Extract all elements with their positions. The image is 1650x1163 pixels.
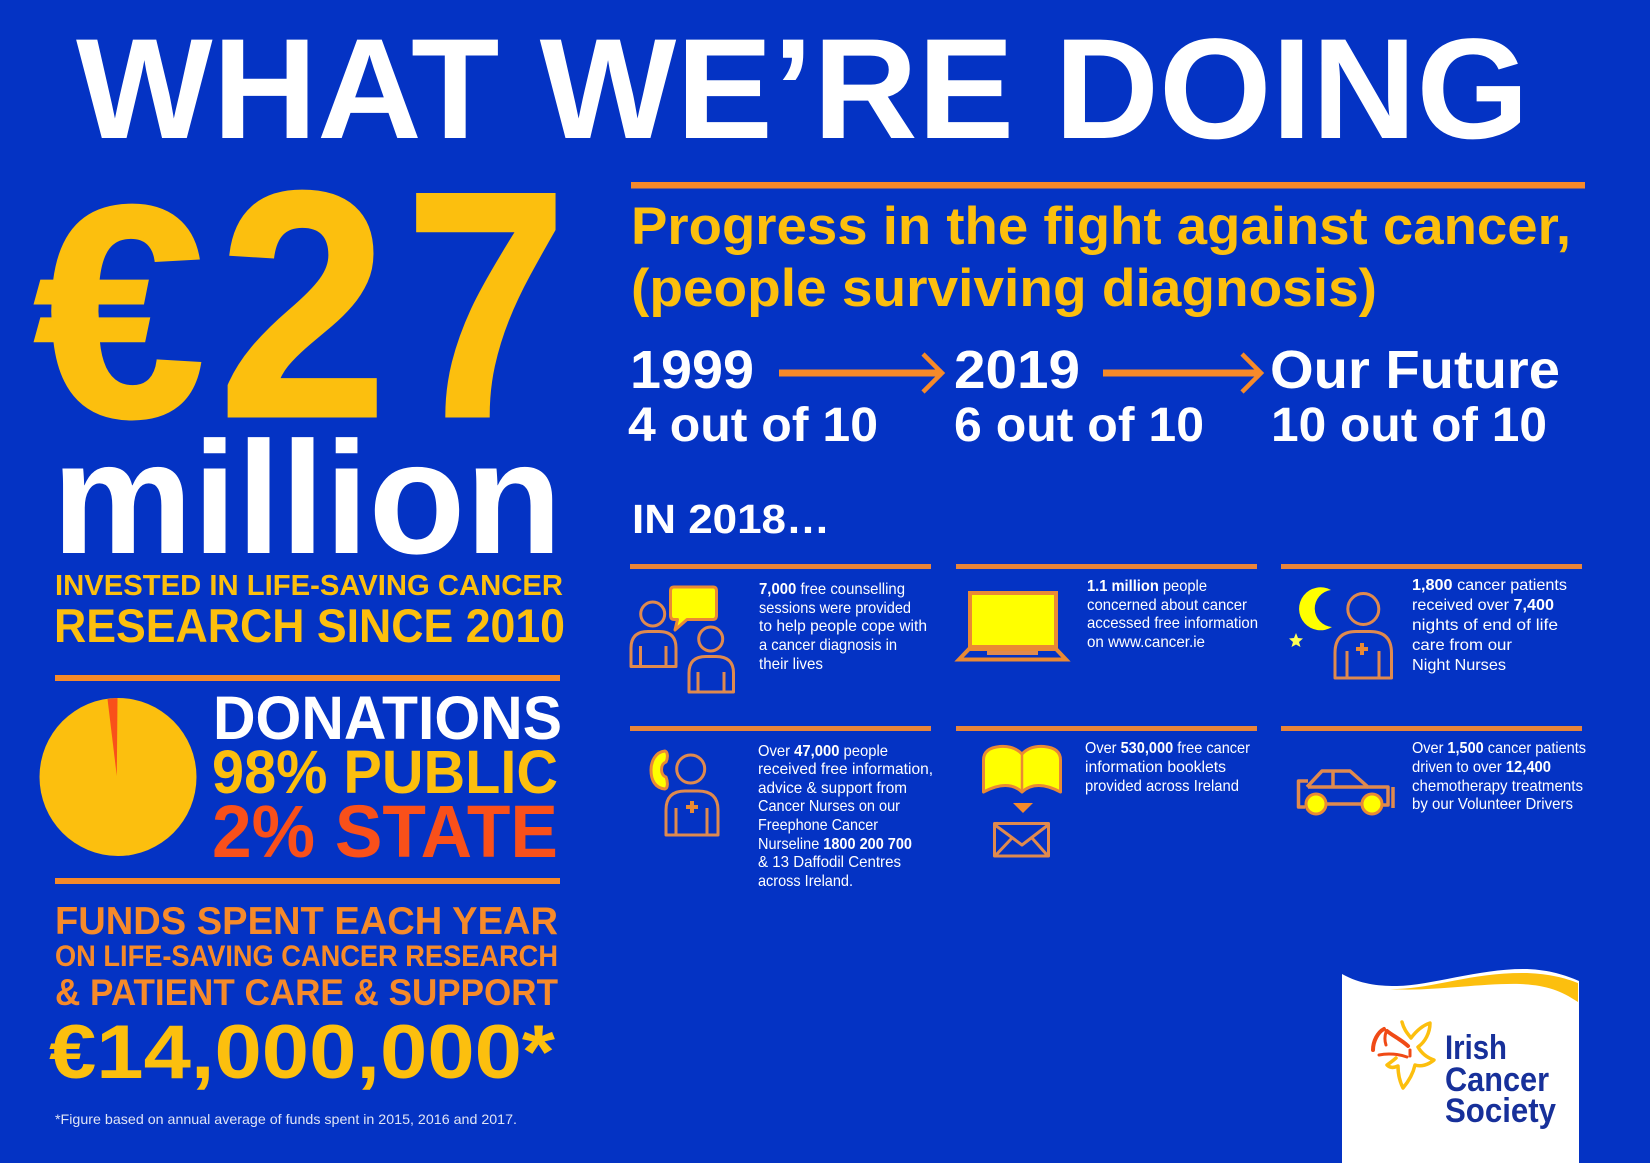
panel: nurseline (651, 743, 933, 890)
icon: moon and star (1289, 587, 1332, 647)
word: million: million (52, 408, 562, 587)
big figure: 27 euro: 7 (405, 126, 567, 485)
big figure: 27 euro: € (34, 143, 205, 480)
logo wordmark: Irish (1445, 1029, 1507, 1067)
text: volunteer drivers: by our Volunteer Drivers (1412, 796, 1573, 813)
logo wordmark: Society (1445, 1092, 1556, 1130)
icon: laptop (959, 593, 1066, 660)
panel: counselling (631, 581, 927, 692)
funds line 1: FUNDS SPENT EACH YEAR (55, 900, 558, 943)
text: volunteer drivers (1412, 740, 1586, 813)
text: counselling: 7,000 free counselling (759, 581, 905, 598)
logo: Irish Cancer Society (1342, 969, 1579, 1163)
text: nurseline: Over 47,000 people (758, 743, 888, 760)
text: counselling: a cancer diagnosis in (759, 637, 897, 654)
text: volunteer drivers: Over 1,500 cancer patients (1412, 740, 1586, 757)
text: counselling: to help people cope with (759, 618, 927, 635)
text: nurseline (758, 743, 933, 890)
icon: envelope (994, 824, 1048, 856)
panel: investment headline (34, 126, 567, 652)
icon: daffodil (1373, 1022, 1434, 1088)
public share: 98% PUBLIC (212, 738, 558, 806)
future stat: Our Future (1270, 340, 1560, 400)
text: nurseline: Cancer Nurses on our (758, 798, 901, 815)
future stat (1270, 340, 1560, 452)
2019 stat: 6 out of 10 (954, 399, 1204, 452)
text: website (1087, 578, 1258, 651)
text: booklets: information booklets (1085, 759, 1226, 776)
future stat: 10 out of 10 (1271, 399, 1547, 452)
text: volunteer drivers: chemotherapy treatments (1412, 778, 1583, 795)
1999 stat (628, 340, 878, 452)
1999 stat: 1999 (630, 340, 754, 400)
arrow: 1999 to 2019 (779, 354, 942, 392)
text: counselling: their lives (759, 656, 823, 673)
text: volunteer drivers: driven to over 12,400 (1412, 759, 1551, 776)
funds figure: €14,000,000* (49, 1010, 555, 1095)
text: night nurses: 1,800 cancer patients (1412, 577, 1567, 594)
panel: volunteer drivers (1298, 740, 1586, 814)
text: night nurses: Night Nurses (1412, 657, 1506, 674)
big figure: 27 euro: 2 (218, 126, 388, 485)
funds line 3: & PATIENT CARE & SUPPORT (55, 972, 558, 1013)
heading: progress: Progress in the fight against cancer, (631, 197, 1571, 256)
logo swoosh (1390, 973, 1578, 1002)
state share: 2% STATE (212, 790, 558, 873)
arrow: 2019 to future (1103, 354, 1261, 392)
text: website: accessed free information (1087, 615, 1258, 632)
text: nurseline: Freephone Cancer (758, 817, 879, 834)
panel: donations text (212, 684, 562, 873)
logo wordmark: Cancer (1445, 1061, 1549, 1099)
timeline (628, 340, 1560, 452)
text: website: on www.cancer.ie (1087, 634, 1205, 651)
text: nurseline: Nurseline 1800 200 700 (758, 836, 912, 853)
text: counselling: sessions were provided (759, 600, 911, 617)
footnote: *Figure based on annual average of funds spent in 2015, 2016 and 2017. (55, 1111, 517, 1127)
icon: open book (984, 746, 1060, 792)
heading: progress (631, 197, 1571, 318)
text: night nurses (1412, 577, 1567, 674)
icon: phone (651, 751, 667, 789)
donations heading: DONATIONS (213, 684, 562, 752)
2019 stat (954, 340, 1204, 452)
investment caption line 1: INVESTED IN LIFE-SAVING CANCER (55, 570, 563, 602)
icon: down triangle (1013, 803, 1033, 813)
investment caption line 2: RESEARCH SINCE 2010 (54, 599, 565, 652)
icon: nurse (1335, 594, 1392, 678)
logo panel (1342, 969, 1579, 1163)
panel: website (959, 578, 1258, 660)
text: website: concerned about cancer (1087, 597, 1248, 614)
text: night nurses: care from our (1412, 637, 1513, 654)
text: booklets (1085, 740, 1251, 795)
text: counselling (759, 581, 927, 673)
icon: nurse (666, 755, 718, 835)
text: night nurses: nights of end of life (1412, 617, 1558, 634)
panel: night nurses (1289, 577, 1567, 678)
text: nurseline: received free information, (758, 761, 933, 778)
text: nurseline: & 13 Daffodil Centres (758, 854, 901, 871)
pie chart: donations (40, 698, 196, 856)
big figure: 27 euro (34, 126, 567, 485)
2019 stat: 2019 (954, 340, 1080, 400)
text: nurseline: advice & support from (758, 780, 907, 797)
title: WHAT WE’RE DOING (76, 10, 1529, 169)
text: night nurses: received over 7,400 (1412, 597, 1554, 614)
icon: car (1298, 771, 1393, 814)
panel: funds spent (49, 900, 558, 1127)
heading: in 2018: IN 2018… (632, 496, 830, 542)
funds line 2: ON LIFE-SAVING CANCER RESEARCH (55, 940, 558, 973)
text: booklets: provided across Ireland (1085, 778, 1239, 795)
text: website: 1.1 million people (1087, 578, 1207, 595)
text: booklets: Over 530,000 free cancer (1085, 740, 1251, 757)
1999 stat: 4 out of 10 (628, 399, 878, 452)
text: nurseline: across Ireland. (758, 873, 853, 890)
icon: people talking (631, 587, 734, 692)
panel: booklets (984, 740, 1251, 856)
logo wordmark (1445, 1029, 1556, 1130)
heading: progress: (people surviving diagnosis) (631, 259, 1377, 318)
